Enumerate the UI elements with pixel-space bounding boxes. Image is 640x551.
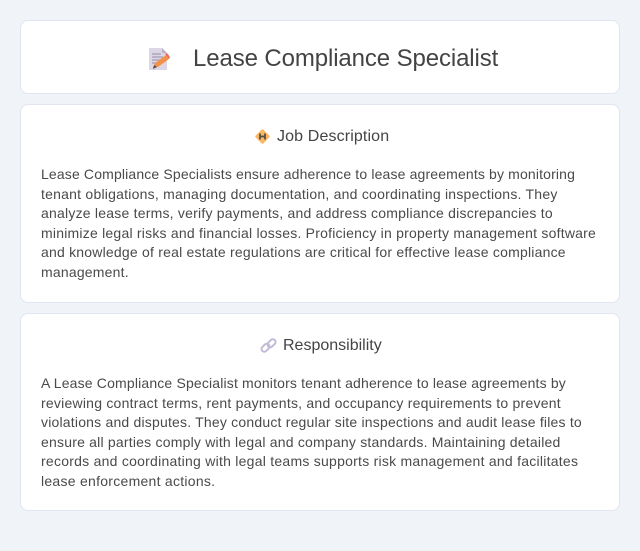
icon: document with pencil [149,48,170,70]
text block: job description [41,166,596,280]
text block: responsibility: ensure all parties comply with legal and company standards. Maintaining detailed [41,434,561,450]
text block: job description: Lease Compliance Specialists ensure adherence to lease agreements by monitoring [41,166,575,182]
icon: orange diamond [255,129,270,144]
heading: responsibility: Responsibility [283,337,382,354]
panel: title card [20,20,620,94]
text block: responsibility: records and coordinating with legal teams supports risk management and facilitates [41,453,578,469]
text block: responsibility: violations and disputes. They conduct regular site inspections and audit lease files to [41,414,582,430]
text block: job description: management. [41,264,129,280]
title: Lease Compliance Specialist [193,45,498,72]
heading: job description: Job Description [277,128,389,145]
text block: responsibility: reviewing contract terms, rent payments, and occupancy requirements to prevent [41,394,561,410]
text block: responsibility [41,375,582,488]
text block: job description: analyze lease terms, verify payments, and address compliance discrepancies to [41,205,553,221]
icon: chain link [260,338,276,353]
text block: job description: and knowledge of real estate regulations are critical for effective lease compliance [41,244,566,260]
panel: responsibility [20,313,620,511]
text block: responsibility: lease enforcement actions. [41,472,215,488]
text block: job description: minimize legal risks and financial losses. Proficiency in property management software [41,224,596,240]
text block: responsibility: A Lease Compliance Specialist monitors tenant adherence to lease agreements by [41,375,566,391]
text block: job description: tenant obligations, managing documentation, and coordinating inspections. They [41,186,558,202]
panel: job description [20,104,620,303]
